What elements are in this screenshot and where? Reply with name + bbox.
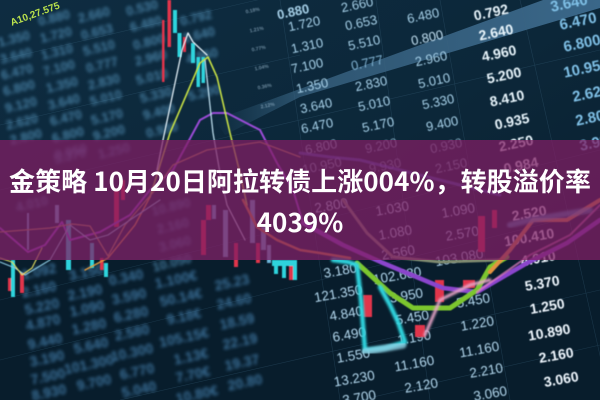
bright number column, lower right: 4.010 bbox=[519, 247, 557, 269]
blurred number columns, left: 2.800 bbox=[8, 125, 44, 148]
sharp number columns, lower right: 1.090 bbox=[440, 200, 476, 221]
blurred number columns, lower left: 101.300 bbox=[63, 351, 116, 377]
bright number column: 2.640 bbox=[477, 21, 515, 44]
sharp number columns, lower right: 1.550 bbox=[335, 345, 371, 366]
blurred number columns, lower left: 5.040 bbox=[120, 378, 158, 400]
blurred number columns, lower left: 25.23 bbox=[213, 271, 251, 294]
blurred number columns, left: 3.060 bbox=[157, 232, 193, 255]
small faint label column: 0.18% bbox=[245, 6, 261, 15]
blurred number columns, left: 2.830 bbox=[86, 70, 122, 93]
blurred number columns, lower left: 19.37 bbox=[223, 351, 261, 374]
blurred number columns, left: 5.010 bbox=[88, 86, 124, 109]
sharp number columns, upper right: 9.400 bbox=[425, 113, 460, 134]
blurred number columns, lower left: 1.100€ bbox=[153, 267, 199, 291]
blurred number columns, lower left: 2.580 bbox=[113, 321, 151, 344]
blurred number columns, left: 1.310 bbox=[39, 40, 75, 63]
sharp number columns, lower right: 13.230 bbox=[333, 368, 376, 390]
sharp number columns, lower right: 2.120 bbox=[403, 375, 439, 396]
sharp number columns, upper right: 0.653 bbox=[344, 12, 379, 33]
blurred number columns, lower left: 5.640 bbox=[72, 334, 110, 357]
sharp number columns, upper right bbox=[276, 0, 469, 177]
blurred number columns, left: 1.250 bbox=[96, 139, 132, 162]
blurred number columns, left: 0.930 bbox=[144, 118, 180, 141]
bright number column, lower right bbox=[503, 202, 580, 390]
small faint label column: 1.04% bbox=[254, 63, 270, 72]
highlighted table row bbox=[215, 0, 600, 135]
blurred number columns, lower left: 3.590 bbox=[110, 285, 148, 308]
blurred number columns, left: 6.800 bbox=[1, 76, 37, 99]
blurred number columns, lower left: 20.80 bbox=[226, 371, 264, 394]
blurred number columns, left: 4.010 bbox=[14, 192, 50, 215]
sharp number columns, upper right: 5.510 bbox=[347, 32, 382, 53]
sharp number columns, lower right: 2.570 bbox=[444, 223, 480, 244]
bright number column, lower right: 5.370 bbox=[523, 272, 561, 294]
title text bbox=[9, 162, 591, 240]
corner ticker text: A10,27.575 bbox=[9, 0, 62, 29]
bright number column, lower right: 10.890 bbox=[527, 320, 572, 344]
blurred number columns, left: 2.660 bbox=[76, 3, 112, 26]
blurred number columns, lower left: 7.70€ bbox=[174, 363, 212, 386]
sharp number columns, upper right: 9.930 bbox=[368, 155, 403, 176]
purple title band bbox=[0, 140, 600, 260]
sharp number columns, upper right: 2.830 bbox=[354, 73, 389, 94]
blurred number columns, left: 1.350 bbox=[44, 73, 80, 96]
blurred number columns, left: 0.653 bbox=[79, 20, 115, 43]
sharp number columns, lower right: 11.160 bbox=[458, 339, 500, 360]
blurred number columns, lower left: 1.280 bbox=[70, 315, 108, 338]
blurred number columns, lower left: 24.60 bbox=[215, 290, 253, 313]
sharp number columns, upper right: 0.930 bbox=[429, 135, 464, 156]
blurred number columns, left: 9.400 bbox=[141, 100, 177, 123]
blurred number columns, lower left: 10.300 bbox=[109, 340, 155, 364]
sharp number columns, upper right: 1.310 bbox=[290, 35, 325, 56]
small faint label column: 2.12% bbox=[260, 101, 276, 110]
sharp number columns, upper right: 7.100 bbox=[290, 55, 325, 76]
small faint label column: 0.36% bbox=[257, 82, 273, 91]
blurred number columns, left: 0.880 bbox=[36, 6, 72, 29]
far right number column: 6.470 bbox=[558, 9, 598, 34]
blurred number columns, lower left: 2.160 bbox=[20, 278, 58, 301]
sharp number columns, lower right: 5.450 bbox=[455, 290, 491, 311]
blurred number columns, left: 6.480 bbox=[128, 12, 164, 35]
bright number column: 4.960 bbox=[480, 42, 518, 65]
bright number column: 2.250 bbox=[497, 132, 535, 155]
blurred number columns, left: 5.200 bbox=[186, 81, 222, 104]
blurred number columns, lower left: 7.500 bbox=[29, 365, 67, 388]
blurred number columns, lower left: 9.440 bbox=[26, 330, 64, 353]
sharp number columns, lower right: 6.490 bbox=[331, 324, 367, 345]
blurred number columns, left: 9.120 bbox=[3, 93, 39, 116]
sharp number columns, upper right: 10.950 bbox=[301, 154, 343, 177]
blurred number columns, left: 7.100 bbox=[41, 56, 77, 79]
blurred number columns, left: 2.960 bbox=[133, 46, 169, 69]
sharp number columns, lower right: 102.680 bbox=[372, 264, 423, 287]
blurred number columns, lower left: 1.13€ bbox=[172, 345, 210, 368]
sharp number columns, lower right bbox=[313, 195, 508, 400]
blurred number columns, left: 2.640 bbox=[181, 23, 217, 46]
blurred number columns, left: 1.720 bbox=[38, 23, 74, 46]
blurred number columns, left: 6.800 bbox=[50, 123, 86, 146]
sharp number columns, lower right: 3.180 bbox=[322, 260, 358, 281]
sharp number columns, upper right: 6.470 bbox=[300, 115, 335, 136]
small faint label column: 0.77% bbox=[251, 44, 267, 53]
blurred number columns, left: 1.250 bbox=[51, 170, 87, 193]
blurred number columns, lower left: 6.770 bbox=[118, 360, 156, 383]
blurred number columns, lower left: 1.090 bbox=[68, 297, 106, 320]
blurred number columns, lower left: 3.150 bbox=[67, 261, 105, 284]
sharp number columns, upper right: 5.170 bbox=[361, 114, 396, 135]
blurred number columns, left: 9.200 bbox=[91, 121, 127, 144]
blurred number columns, lower left: 2.190 bbox=[66, 281, 104, 304]
sharp number columns, upper right: 0.880 bbox=[276, 1, 311, 22]
sharp number columns, lower right: 2.210 bbox=[468, 360, 504, 381]
blurred number columns, left: 10.050 bbox=[151, 251, 193, 275]
blurred number columns, left: 0.800 bbox=[131, 30, 167, 53]
bright number column bbox=[472, 1, 540, 177]
sharp number columns, upper right: 1.350 bbox=[295, 75, 330, 96]
sharp number columns, upper right: 0.777 bbox=[350, 52, 385, 73]
sharp number columns, upper right: 3.640 bbox=[299, 95, 334, 116]
sharp number columns, upper right: 5.010 bbox=[417, 70, 452, 91]
sharp number columns, upper right: 1.720 bbox=[287, 13, 322, 34]
sharp number columns, lower right: 1.190 bbox=[396, 327, 432, 348]
sharp number columns, upper right: 5.010 bbox=[357, 93, 392, 114]
bright number column: 8.410 bbox=[488, 87, 526, 110]
sharp number columns, lower right: 2.560 bbox=[380, 242, 416, 263]
blurred number columns, left: 5.370 bbox=[52, 144, 88, 167]
bright number column, lower right: 3.060 bbox=[542, 368, 580, 390]
bright number column, lower right: 100.410 bbox=[503, 225, 556, 249]
sharp number columns, upper right: 6.480 bbox=[406, 5, 441, 26]
bright number column, lower right: 2.160 bbox=[537, 344, 575, 366]
small faint label column bbox=[245, 6, 276, 110]
blurred number columns, left: 10.890 bbox=[150, 195, 192, 219]
blurred number columns, left: 0.777 bbox=[84, 53, 120, 76]
sharp number columns, lower right: 1.220 bbox=[459, 313, 495, 334]
blurred number columns, lower left: 0.340 bbox=[107, 266, 145, 289]
blurred number columns, left: 2.620 bbox=[4, 110, 40, 133]
price lines bbox=[0, 33, 600, 352]
sharp number columns, lower right: 121.350 bbox=[313, 282, 364, 305]
blurred number columns, left: 3.640 bbox=[46, 90, 82, 113]
bright number column: 0.984 bbox=[502, 154, 540, 177]
bright number column: 0.792 bbox=[472, 1, 510, 24]
blurred number columns, lower left: 50.14€ bbox=[158, 285, 204, 309]
sharp number columns, lower right: 3.950 bbox=[388, 285, 424, 306]
blurred number columns, left: 5.010 bbox=[134, 65, 170, 88]
sharp number columns, lower right: 4.840 bbox=[328, 303, 364, 324]
sharp number columns, upper right: 5.330 bbox=[421, 91, 456, 112]
blurred number columns, lower left bbox=[20, 260, 264, 400]
sharp number columns, lower right: 1.080 bbox=[377, 222, 413, 243]
bright number column: 5.200 bbox=[485, 64, 523, 87]
blurred number columns, left: 6.470 bbox=[48, 106, 84, 129]
blurred number columns, lower left: 1.092 bbox=[20, 260, 58, 283]
small faint label column: 1.21% bbox=[249, 25, 265, 34]
sharp number columns, lower right: 1.030 bbox=[374, 198, 410, 219]
far right number column bbox=[549, 0, 600, 155]
bright number column, lower right: 2.520 bbox=[510, 202, 548, 224]
sharp number columns, lower right: 2.800 bbox=[313, 195, 349, 216]
blurred number columns, left: 0.792 bbox=[178, 6, 214, 29]
sharp number columns, upper right: 9.200 bbox=[364, 135, 399, 156]
sharp number columns, upper right: 2.150 bbox=[434, 155, 469, 176]
blurred number columns, left: 5.510 bbox=[81, 36, 117, 59]
bright number column: 0.935 bbox=[493, 110, 531, 133]
sharp number columns, upper right: 0.800 bbox=[410, 27, 445, 48]
blurred number columns, left: 4.960 bbox=[184, 44, 220, 67]
blurred number columns, left: 6.470 bbox=[0, 60, 35, 83]
sharp number columns, lower right: 11.160 bbox=[393, 353, 435, 374]
blurred number columns, left: 5.170 bbox=[89, 105, 125, 128]
candlesticks bbox=[8, 0, 497, 337]
blurred number columns, lower left: 18.59 bbox=[218, 310, 256, 333]
blurred number columns, lower left: 5.220 bbox=[23, 295, 61, 318]
sharp number columns, lower right: 103.080 bbox=[434, 246, 485, 269]
blurred number columns, lower left: 105.15€ bbox=[158, 324, 211, 350]
blurred number columns, left: 5.330 bbox=[138, 83, 174, 106]
blurred number columns, lower left: 4.870 bbox=[24, 311, 62, 334]
blurred number columns, lower left: 3.190 bbox=[28, 347, 66, 370]
title text: 金策略 10月20日阿拉转债上涨004%，转股溢价率 bbox=[9, 162, 591, 199]
sharp number columns, upper right: 6.800 bbox=[304, 136, 339, 157]
title text: 4039% bbox=[257, 203, 343, 240]
blurred number columns, lower left: 6.280 bbox=[112, 303, 150, 326]
blurred number columns, left: 9.950 bbox=[53, 140, 89, 163]
blurred number columns, lower left: 9.700 bbox=[75, 371, 113, 394]
blurred number columns, lower left: 22.19 bbox=[221, 330, 259, 353]
blurred number columns, left: 2.160 bbox=[155, 214, 191, 237]
blurred number columns, left bbox=[0, 0, 222, 275]
sharp number columns, lower right: 5.450 bbox=[394, 307, 430, 328]
blurred number columns, lower left: 9.18€ bbox=[165, 305, 203, 328]
bright number column, lower right: 1.250 bbox=[528, 295, 566, 317]
sharp number columns, upper right: 2.960 bbox=[414, 48, 449, 69]
